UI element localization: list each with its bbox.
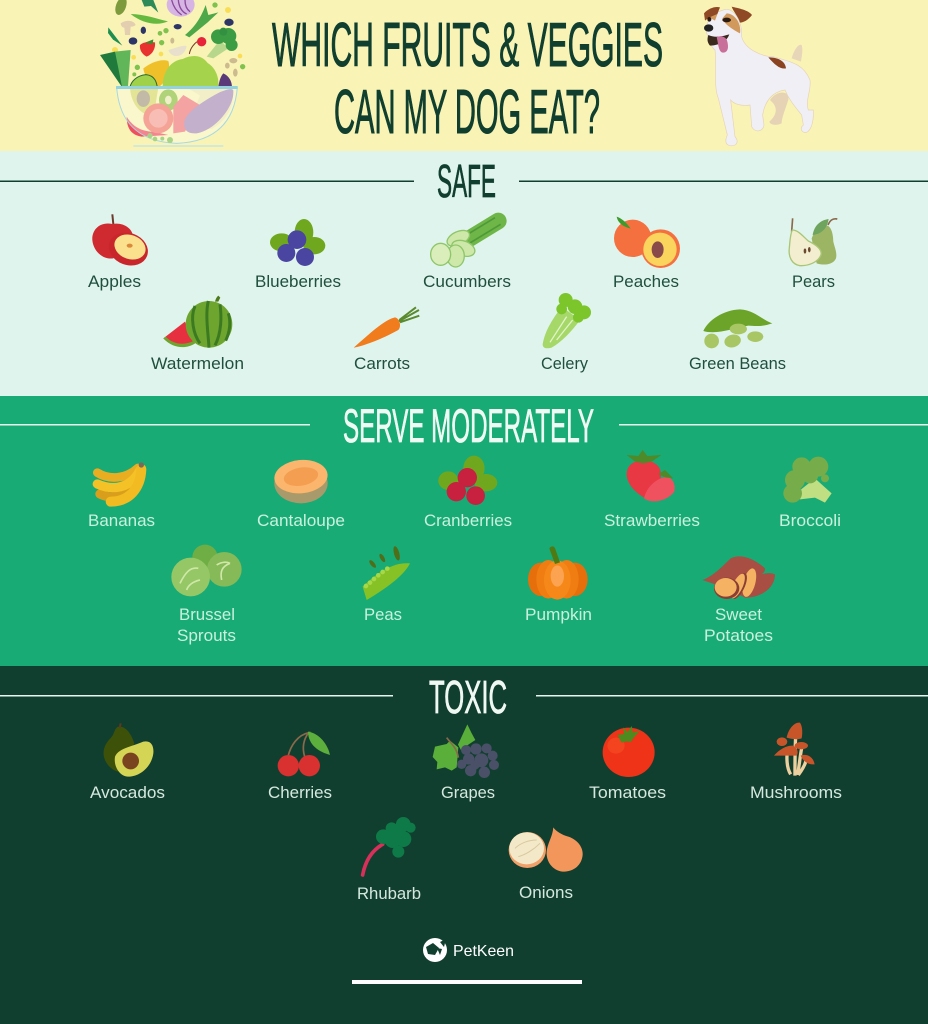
item: mushrooms: Mushrooms [750, 784, 842, 802]
panel: serve moderately [0, 396, 928, 666]
item: rhubarb [357, 817, 421, 903]
panel: header [0, 0, 928, 151]
title: CAN MY DOG EAT? [334, 78, 600, 147]
item: apples: Apples [88, 273, 141, 291]
item: cantaloupe [257, 458, 345, 530]
item: pears: Pears [792, 273, 835, 291]
title [272, 11, 663, 147]
item: strawberries [604, 450, 700, 530]
item: onions: Onions [519, 884, 573, 902]
item: broccoli [779, 457, 841, 530]
panel: toxic [0, 666, 928, 1024]
item: brussel sprouts: Brussel [179, 606, 235, 624]
item: strawberries: Strawberries [604, 512, 700, 530]
logo: PetKeen [423, 938, 514, 962]
item: cherries: Cherries [268, 784, 332, 802]
item: cherries [268, 732, 332, 802]
item: watermelon: Watermelon [151, 355, 244, 373]
item: grapes: Grapes [441, 784, 495, 802]
item: celery: Celery [541, 355, 589, 373]
item: cucumbers: Cucumbers [423, 273, 511, 291]
item: cranberries [424, 456, 512, 530]
item: watermelon [151, 296, 244, 373]
item: tomatoes: Tomatoes [589, 784, 666, 802]
item: broccoli: Broccoli [779, 512, 841, 530]
item: pears [789, 218, 837, 291]
item: carrots: Carrots [354, 355, 410, 373]
item: apples [88, 214, 153, 291]
item: green beans: Green Beans [689, 355, 786, 373]
item: brussel sprouts: Sprouts [177, 627, 236, 645]
panel: safe: SAFE [437, 155, 496, 207]
icon: dog [704, 7, 813, 146]
panel: safe [0, 151, 928, 396]
item: peas [363, 546, 410, 624]
item: bananas: Bananas [88, 512, 155, 530]
item: mushrooms [750, 723, 842, 802]
item: green beans [689, 309, 786, 373]
heading: toxic: TOXIC [429, 671, 507, 723]
item: rhubarb: Rhubarb [357, 885, 421, 903]
heading: serve moderately: SERVE MODERATELY [343, 399, 594, 452]
item: pumpkin [525, 546, 592, 624]
item: blueberries: Blueberries [255, 273, 341, 291]
item: onions [509, 827, 583, 902]
logo: PetKeen: PetKeen [453, 943, 514, 960]
item: blueberries [255, 219, 341, 291]
item: tomatoes [589, 726, 666, 802]
item: cucumbers [423, 218, 511, 291]
item: sweet potatoes: Sweet [715, 606, 762, 624]
item: peaches [613, 217, 680, 291]
item: avocados [90, 723, 165, 802]
item: brussel sprouts [171, 545, 242, 645]
item: bananas [88, 462, 155, 530]
item: celery [541, 293, 591, 373]
item: sweet potatoes [702, 556, 775, 645]
item: cantaloupe: Cantaloupe [257, 512, 345, 530]
item: peaches: Peaches [613, 273, 679, 291]
item: avocados: Avocados [90, 784, 165, 802]
item: carrots [354, 307, 419, 373]
item: sweet potatoes: Potatoes [704, 627, 773, 645]
item: grapes [433, 724, 499, 802]
item: pumpkin: Pumpkin [525, 606, 592, 624]
item: peas: Peas [364, 606, 402, 624]
icon: salad bowl [100, 0, 245, 147]
item: cranberries: Cranberries [424, 512, 512, 530]
